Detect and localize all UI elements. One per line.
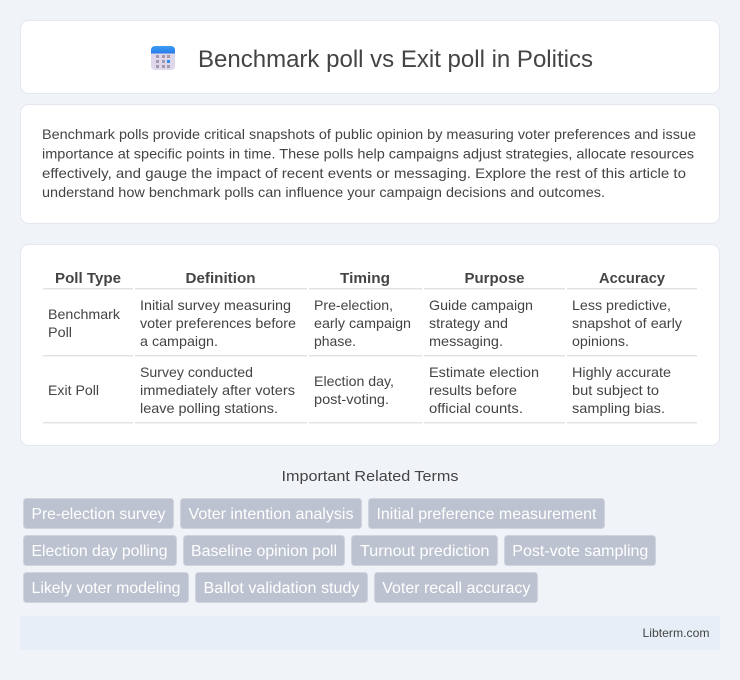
- row: Benchmark Poll: Less predictive,: [572, 297, 671, 313]
- table header: Poll Type: [55, 271, 121, 287]
- tag: [374, 572, 538, 602]
- tag: [184, 536, 344, 566]
- panel: introduction: [20, 104, 720, 224]
- row: Benchmark Poll: voter preferences before: [140, 315, 296, 331]
- intro text: [42, 126, 696, 200]
- row: Exit Poll: results before: [429, 382, 517, 398]
- tag: Initial preference measurement: [376, 506, 597, 523]
- row: Benchmark Poll: Initial survey measuring: [140, 297, 291, 313]
- tag: Likely voter modeling: [32, 580, 180, 597]
- row: Benchmark Poll: Poll: [48, 324, 72, 340]
- table header: [55, 271, 665, 287]
- table header: Accuracy: [599, 271, 665, 287]
- related terms heading: Important Related Terms: [282, 469, 458, 485]
- title: Benchmark poll vs Exit poll in Politics: [198, 46, 593, 73]
- footer: [20, 616, 720, 650]
- row: Exit Poll: [48, 364, 671, 416]
- tag: Post-vote sampling: [512, 543, 648, 560]
- tag: [352, 536, 498, 566]
- tag: [24, 498, 174, 528]
- row: Exit Poll: Survey conducted: [140, 364, 253, 380]
- tag: [24, 536, 176, 566]
- row: Benchmark Poll: Guide campaign: [429, 297, 533, 313]
- row: Benchmark Poll: [48, 297, 682, 349]
- tag: Ballot validation study: [204, 580, 360, 597]
- tag: [504, 536, 656, 566]
- row: Benchmark Poll: Pre-election,: [314, 297, 393, 313]
- row: Exit Poll: Exit Poll: [48, 382, 99, 398]
- tag: Pre-election survey: [32, 506, 166, 523]
- row: Benchmark Poll: snapshot of early: [572, 315, 682, 331]
- row: Benchmark Poll: Benchmark: [48, 306, 121, 322]
- row: Exit Poll: sampling bias.: [572, 400, 665, 416]
- row: Benchmark Poll: opinions.: [572, 333, 629, 349]
- row: Exit Poll: Highly accurate: [572, 364, 671, 380]
- tag: Baseline opinion poll: [191, 543, 337, 560]
- table rules: [43, 288, 697, 423]
- table header: Definition: [186, 271, 256, 287]
- row: Exit Poll: Estimate election: [429, 364, 539, 380]
- tag: Voter intention analysis: [188, 506, 354, 523]
- row: Benchmark Poll: early campaign: [314, 315, 411, 331]
- row: Benchmark Poll: phase.: [314, 333, 356, 349]
- row: Exit Poll: post-voting.: [314, 391, 389, 407]
- table header: Timing: [340, 271, 390, 287]
- tag: [368, 498, 604, 528]
- row: Benchmark Poll: a campaign.: [140, 333, 218, 349]
- row: Exit Poll: but subject to: [572, 382, 659, 398]
- tag: Voter recall accuracy: [382, 580, 530, 597]
- row: Benchmark Poll: strategy and: [429, 315, 508, 331]
- tag: Turnout prediction: [360, 543, 490, 560]
- tag: Election day polling: [32, 543, 168, 560]
- panel: comparison table: [20, 244, 720, 446]
- intro text: understand how benchmark polls can influence your campaign decisions and outcomes.: [42, 184, 605, 200]
- intro text: Benchmark polls provide critical snapshots of public opinion by measuring voter preferences and issue: [42, 126, 696, 142]
- footer credit: Libterm.com: [642, 626, 710, 640]
- intro text: effectively, and gauge the impact of recent events or messaging. Explore the rest of this article to: [42, 165, 686, 181]
- tag: [180, 498, 362, 528]
- panel: title header: [20, 20, 720, 94]
- row: Exit Poll: leave polling stations.: [140, 400, 278, 416]
- row: Exit Poll: Election day,: [314, 373, 394, 389]
- tags: related terms: [24, 498, 656, 602]
- icon: calendar: [151, 46, 175, 70]
- table header: Purpose: [464, 271, 524, 287]
- row: Exit Poll: immediately after voters: [140, 382, 295, 398]
- intro text: importance at specific points in time. These polls help campaigns adjust strategies, allocate resources: [42, 146, 694, 162]
- tag: [196, 572, 368, 602]
- row: Benchmark Poll: messaging.: [429, 333, 503, 349]
- row: Exit Poll: official counts.: [429, 400, 523, 416]
- tag: [24, 572, 188, 602]
